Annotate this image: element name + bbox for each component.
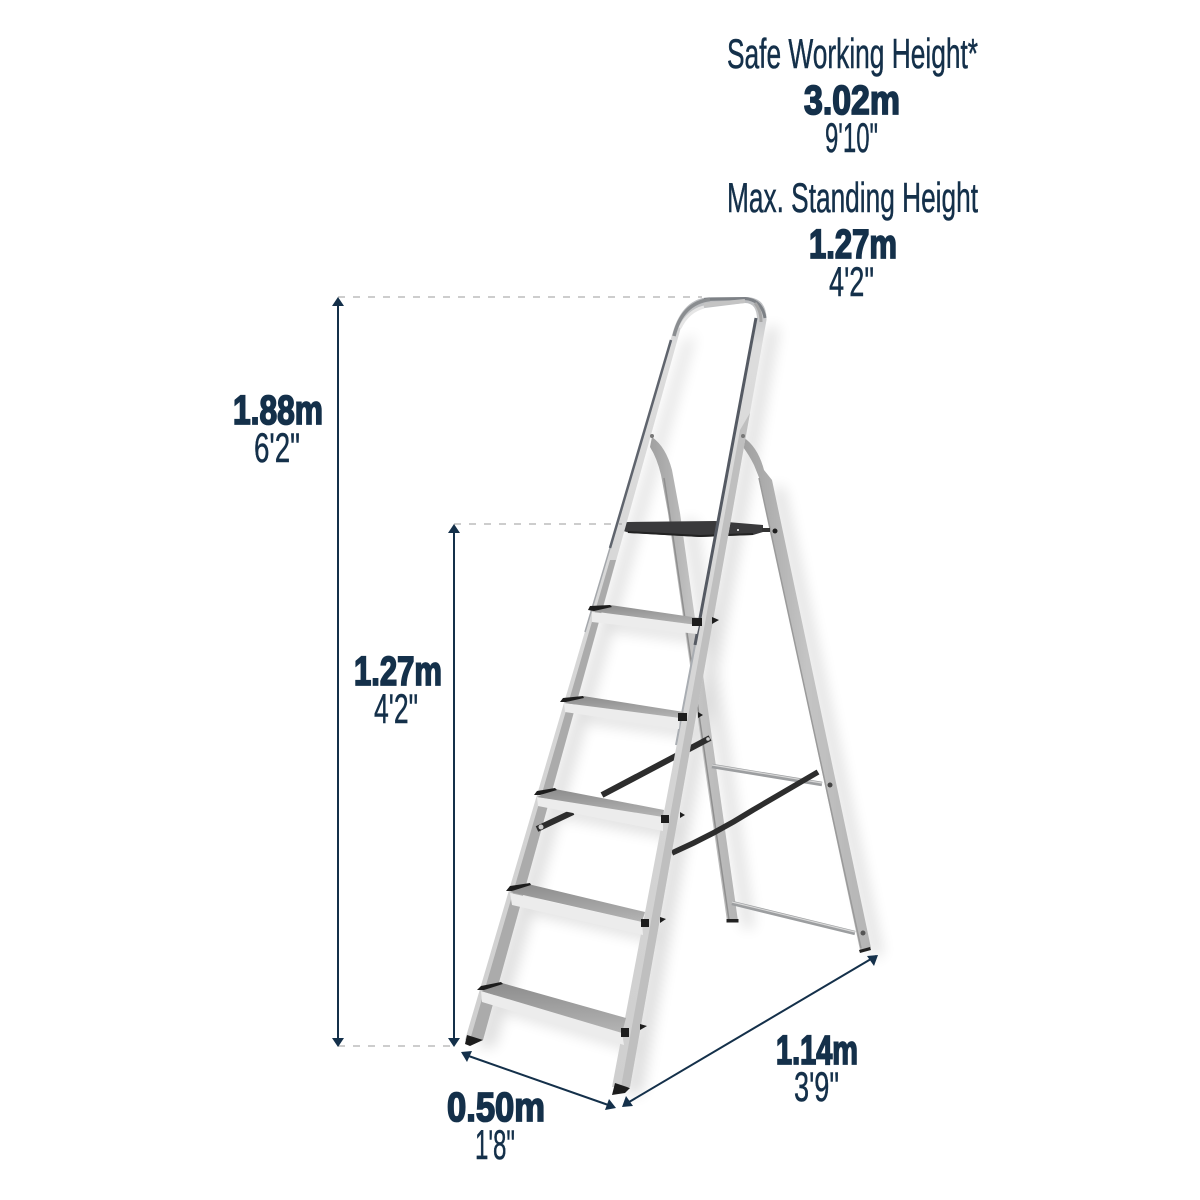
front frame with top handle (465, 297, 767, 1087)
step 1 (588, 605, 719, 634)
step 3 (534, 788, 685, 831)
label: standing height: 4'2" (374, 685, 418, 732)
label: width: 1'8" (475, 1121, 515, 1168)
black top platform (620, 521, 778, 537)
rubber feet (465, 1035, 630, 1095)
arrow: depth (622, 955, 878, 1107)
label: width (447, 1084, 545, 1168)
arrow: standing height (448, 524, 460, 1047)
soft ladder shadow (477, 327, 883, 1094)
rear rods (712, 765, 855, 933)
arrow: overall height (332, 297, 344, 1047)
label: width: 0.50m (447, 1084, 545, 1130)
front strap (602, 737, 710, 795)
ladder (465, 297, 871, 1095)
label: standing height (354, 648, 442, 732)
rear strap (672, 772, 818, 853)
label: depth: 3'9" (794, 1063, 839, 1110)
text: max standing height (727, 174, 978, 305)
front strap lower end (537, 812, 573, 830)
rear right leg (743, 437, 871, 953)
label: overall height: 6'2" (254, 424, 300, 471)
text: max standing height: 1.27m (809, 221, 897, 267)
text: safe working height: 3.02m (804, 77, 900, 123)
text: max standing height: 4'2" (829, 258, 874, 305)
text: safe working height: 9'10" (825, 114, 878, 161)
label: standing height: 1.27m (354, 648, 442, 694)
step 2 (560, 696, 703, 729)
rear left leg (650, 437, 738, 922)
label: overall height: 1.88m (233, 387, 323, 433)
label: depth (776, 1027, 858, 1110)
step 5 (477, 982, 647, 1045)
label: overall height (233, 387, 323, 471)
label: depth: 1.14m (776, 1027, 858, 1073)
text: max standing height: Max. Standing Height (727, 174, 978, 221)
step 4 (506, 883, 666, 935)
dimension guide lines (338, 297, 702, 1046)
text: safe working height: Safe Working Height* (727, 30, 978, 77)
arrow: width (461, 1051, 616, 1110)
text: safe working height (727, 30, 978, 161)
